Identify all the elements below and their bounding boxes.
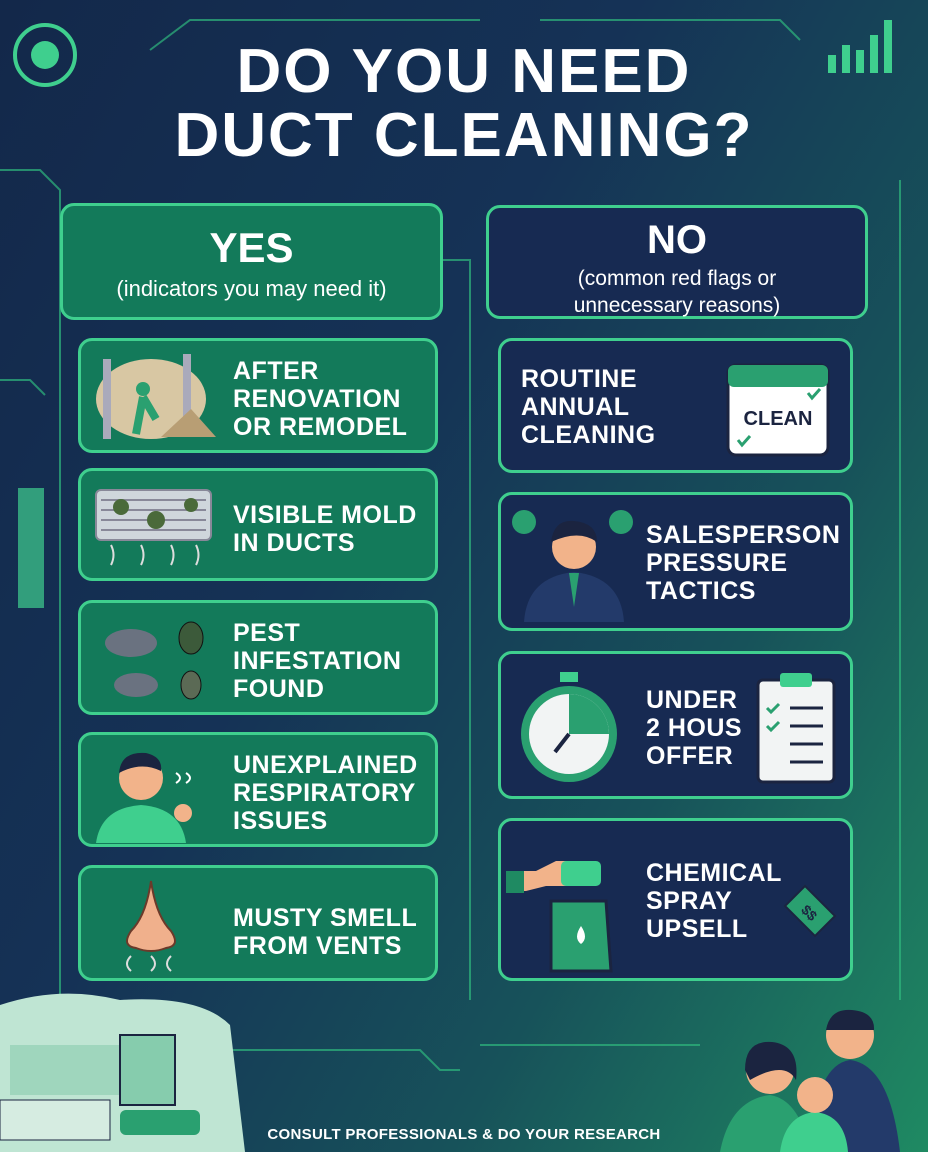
card: salesperson: TACTICS xyxy=(646,577,756,605)
card: routine annual: ROUTINE xyxy=(521,365,637,393)
panel: NO header xyxy=(486,205,868,319)
card: after renovation: AFTER xyxy=(233,357,319,385)
card: under 2 hours offer: OFFER xyxy=(646,742,733,770)
card: chemical spray: CHEMICAL xyxy=(646,859,782,887)
card: salesperson: SALESPERSON xyxy=(646,521,840,549)
card: musty smell: FROM VENTS xyxy=(233,932,402,960)
card: pest: PEST xyxy=(233,619,300,647)
panel: NO header: unnecessary reasons) xyxy=(574,294,780,317)
panel: YES header: YES xyxy=(209,224,294,271)
card: under 2 hours offer: 2 HOUS xyxy=(646,714,742,742)
illustration: family xyxy=(720,1010,900,1152)
title: DO YOU NEED xyxy=(237,37,691,106)
panel: NO header: NO xyxy=(647,218,707,262)
card: chemical spray: SPRAY xyxy=(646,887,732,915)
card: visible mold xyxy=(78,468,438,581)
card: chemical spray: $$ xyxy=(798,902,821,924)
card: musty smell xyxy=(78,865,438,981)
card: routine annual: CLEAN xyxy=(744,408,812,430)
card: respiratory: RESPIRATORY xyxy=(233,779,416,807)
card: routine annual: CLEANING xyxy=(521,421,656,449)
card: respiratory xyxy=(78,732,438,847)
card: after renovation: RENOVATION xyxy=(233,385,401,413)
panel: YES header xyxy=(60,203,443,320)
card: pest xyxy=(78,600,438,715)
card: respiratory: ISSUES xyxy=(233,807,328,835)
card: salesperson: PRESSURE xyxy=(646,549,788,577)
card: visible mold: VISIBLE MOLD xyxy=(233,501,417,529)
card: pest: FOUND xyxy=(233,675,324,703)
card: musty smell: MUSTY SMELL xyxy=(233,904,417,932)
panel: YES header: (indicators you may need it) xyxy=(116,276,387,301)
card: under 2 hours offer xyxy=(498,651,853,799)
footer text: CONSULT PROFESSIONALS & DO YOUR RESEARCH xyxy=(267,1126,661,1143)
card: chemical spray: UPSELL xyxy=(646,915,748,943)
card: routine annual: ANNUAL xyxy=(521,393,630,421)
card: respiratory: UNEXPLAINED xyxy=(233,751,418,779)
card: after renovation: OR REMODEL xyxy=(233,413,407,441)
card: visible mold: IN DUCTS xyxy=(233,529,355,557)
card: salesperson xyxy=(498,492,853,631)
panel: NO header: (common red flags or xyxy=(578,267,776,290)
illustration: living room xyxy=(0,994,245,1152)
card: chemical spray xyxy=(498,818,853,981)
card: under 2 hours offer: UNDER xyxy=(646,686,737,714)
card: after renovation xyxy=(78,338,438,453)
card: pest: INFESTATION xyxy=(233,647,401,675)
title xyxy=(174,37,754,170)
title: DUCT CLEANING? xyxy=(174,101,754,170)
card: routine annual xyxy=(498,338,853,473)
